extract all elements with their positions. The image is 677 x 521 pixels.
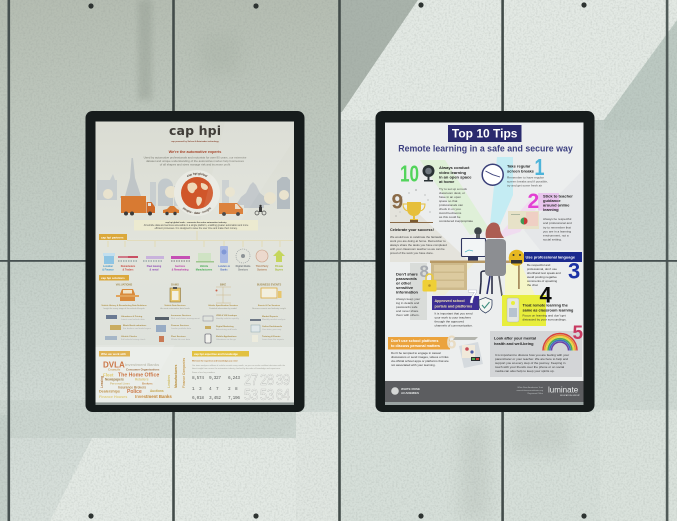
statistics numbers: 9,327	[209, 376, 221, 381]
sector: private buyers: Buyers	[275, 268, 284, 271]
tip body: have in an open	[439, 195, 461, 199]
tip body: Don't be tempted to engage in casual	[391, 351, 441, 355]
sector: digital media: Digital Media	[236, 265, 251, 268]
sector: leasing and finance: Location	[103, 265, 114, 268]
footer address	[517, 386, 544, 395]
tip body: touch with your friends over the phone or on social	[495, 365, 564, 369]
tip body	[543, 217, 572, 242]
tip body: as this could be	[439, 215, 461, 219]
poster: cap hpi	[86, 111, 304, 412]
sector: vehicle manufacturers: Vehicle	[200, 265, 209, 268]
tip heading: Take regular	[507, 164, 531, 168]
sector: lenders and banks: Banks	[220, 268, 228, 271]
column one details: Full vehicle history check	[121, 338, 146, 341]
tip body: Always keep your	[396, 297, 420, 301]
tip body: parent/carer or your teacher. We are here to help and	[495, 357, 568, 361]
word cloud: Investment Banks	[135, 394, 172, 399]
tip heading: Don't use school platforms	[391, 339, 438, 343]
subtitle: Remote learning in a safe and secure way	[398, 144, 573, 154]
tip body: the chat	[527, 283, 538, 287]
tip heading: learning	[543, 207, 559, 212]
icon: certificate	[261, 288, 282, 298]
tip 10: open space	[400, 160, 473, 223]
sector: auctions: & Remarketing	[172, 268, 189, 271]
statistics numbers: 8,574	[192, 376, 204, 381]
logo: white rose academies: ACADEMIES	[401, 391, 419, 395]
column headings: BUSINESS EVENTS	[257, 282, 281, 286]
word cloud: DVLA	[103, 360, 125, 370]
tip heading: Treat remote learning the	[522, 304, 568, 308]
column three details: Valuations on the go	[216, 338, 237, 341]
tip body	[527, 263, 561, 287]
tip body: try to remember that	[543, 225, 571, 229]
tip body: you are in a learning	[543, 229, 571, 233]
beige trees	[103, 186, 289, 204]
logo: luminate: luminate	[548, 386, 579, 394]
tip body	[390, 235, 447, 255]
column four details: Your data, your way	[262, 328, 282, 331]
logo: white rose academies	[391, 387, 420, 395]
tip body: screen breaks and if possible,	[507, 180, 548, 184]
sector: vehicle manufacturers: Manufacturers	[196, 268, 213, 271]
tip heading: screen breaks	[507, 168, 535, 174]
motorbike	[255, 205, 266, 215]
tip body: considered inappropriate	[439, 219, 473, 223]
tip heading: around online	[543, 202, 570, 208]
column one details: Latest used vehicle data	[121, 318, 145, 321]
number 9: 9	[392, 190, 403, 214]
tip 7: approved portals	[432, 287, 492, 328]
tip 1: screen breaks	[482, 154, 548, 188]
icon: car front	[116, 289, 139, 301]
solution captions: Business events and industry insight	[252, 307, 286, 310]
orange lorry	[121, 196, 155, 216]
tip body: Avoid bedrooms	[439, 211, 462, 215]
tip heading: Always conduct	[439, 165, 470, 170]
solution captions: Vehicle Specification Services	[208, 304, 239, 307]
tip body: your work to your teachers	[434, 316, 471, 320]
statistics numbers: 3,452	[209, 396, 221, 401]
callout: cap hpi global code: All vehicle data and services accessible in a single platform, enabling greater automation and more	[144, 224, 249, 227]
confetti	[396, 189, 430, 216]
tip 2: teacher guidance	[508, 190, 573, 242]
tip heading: to discuss personal matters	[391, 344, 440, 348]
statistics numbers: 27	[244, 372, 258, 389]
illustration: phone collage	[459, 342, 483, 368]
word cloud: Retailers	[135, 378, 149, 382]
data intro: Some of our key numbers	[192, 372, 215, 374]
tag: key partners	[99, 234, 127, 240]
globe badge	[174, 170, 220, 216]
tip body: log in details and	[396, 301, 419, 305]
word cloud: Police	[127, 389, 142, 395]
tip body: via official school apps or platforms that are	[391, 359, 449, 363]
column three details: Mobile Applications	[216, 335, 237, 338]
column three details: Digital Marketing	[216, 325, 234, 328]
tip body: Try to set up a mock	[439, 187, 467, 191]
drawer unit	[431, 263, 467, 290]
word cloud: Auctions	[150, 389, 164, 393]
tip body: Be respectful and	[527, 263, 551, 267]
word cloud: Manufacturers	[174, 365, 178, 388]
data intro	[192, 360, 286, 374]
sector: lenders and banks	[218, 246, 230, 271]
sector: auctions	[171, 256, 190, 271]
desk	[430, 260, 521, 263]
column four details	[250, 315, 286, 342]
sector: leasing and finance	[102, 253, 115, 271]
tip heading: video learning	[439, 170, 467, 175]
tip body	[495, 353, 569, 373]
sector: third party systems	[256, 250, 269, 271]
tip heading	[494, 336, 536, 346]
word cloud	[99, 358, 186, 399]
tip body	[391, 351, 449, 367]
tip heading: same as classroom learning	[522, 308, 574, 312]
column three details: Identify vehicles quickly	[216, 317, 240, 320]
tip body: shorthand text speak and	[527, 271, 561, 275]
number 6: 6	[446, 332, 457, 352]
statistics numbers: 53	[244, 387, 258, 404]
poster sheet	[385, 122, 584, 381]
title banner: Top 10 Tips	[452, 127, 518, 141]
chair legs	[480, 271, 502, 296]
tip body	[507, 176, 548, 188]
webcam on monitor	[474, 227, 482, 238]
word cloud: Insurance Brokers	[118, 386, 146, 390]
tip body: It is important that you send	[434, 312, 473, 316]
tip 4: classroom learning	[502, 282, 574, 326]
statistics numbers: 64	[276, 387, 290, 404]
globe badge: cap hpi global	[187, 172, 208, 177]
poster sheet	[96, 122, 294, 402]
solution detail rows	[105, 315, 286, 343]
column four details: Market Reports	[262, 315, 279, 318]
tip heading: at home	[439, 179, 455, 184]
sector: digital media	[236, 249, 251, 271]
tip body: discussions or send images, videos or links	[391, 355, 449, 359]
sector: third party systems: Systems	[257, 268, 268, 271]
statistics numbers: 6,243	[228, 376, 240, 381]
column one details: Valuations & Pricing	[121, 315, 143, 318]
footer address: White Rose Academies Trust	[517, 386, 543, 389]
number 3: 3	[568, 258, 580, 284]
statistics numbers: 28	[260, 372, 274, 389]
tip heading	[543, 194, 573, 212]
solution captions	[101, 304, 286, 310]
tip heading	[391, 339, 440, 348]
logo: luminate: EDUCATION GROUP	[560, 394, 580, 397]
tip body: them with others.	[396, 313, 420, 317]
statistics numbers: 2 8	[228, 387, 238, 392]
solution captions: Insight for every stage of the vehicle lifecycle	[103, 307, 145, 310]
intro paragraph	[144, 156, 247, 166]
column headings: DAMS	[171, 282, 179, 286]
tip heading	[434, 299, 472, 308]
statistics numbers: 6,018	[192, 396, 204, 401]
tip heading bar: Use professional language	[526, 254, 576, 260]
column headings: BIKE	[220, 282, 226, 286]
sector: leasing and finance: & Finance	[102, 268, 114, 271]
icon: rainbow	[543, 334, 577, 350]
sector: third party systems: Third Party	[256, 265, 269, 268]
tip heading: guidance	[543, 198, 561, 203]
tip body: professionals can	[439, 203, 463, 207]
word cloud: Fleet	[103, 372, 114, 378]
tip body: space so that	[439, 199, 458, 203]
tip body: through the approved	[434, 320, 464, 324]
data intro: We have the expertise and knowledge you need	[192, 360, 238, 362]
word cloud: Investment Banks	[125, 362, 160, 367]
statistics numbers: 4 7	[209, 387, 219, 392]
tip heading: passwords	[396, 276, 418, 281]
callout: cap hpi global code	[134, 220, 258, 230]
tip 9: celebrate success	[390, 189, 447, 255]
tip heading: or other	[396, 280, 412, 286]
tag: who we work with	[99, 351, 130, 356]
city skyline silhouette	[97, 158, 290, 209]
sector: vehicle manufacturers	[196, 253, 214, 271]
tip body	[439, 187, 473, 223]
partner connector lines	[108, 231, 293, 247]
tip body: channels of communication.	[434, 324, 473, 328]
sector: fleet leasing: Fleet leasing	[147, 265, 162, 268]
intro paragraph: Used by automotive professionals and motorists for over 80 years, our extensive	[144, 156, 247, 160]
number 1: 1	[534, 154, 545, 180]
column four details: Monthly market analysis	[262, 318, 286, 321]
poster frame	[86, 111, 304, 412]
column four details: Learn from the experts	[262, 338, 285, 341]
tip body: classroom desk, or	[439, 191, 465, 195]
number 2: 2	[528, 190, 539, 213]
orange van	[219, 203, 243, 216]
intro paragraph: of all shapes and sizes manage risk and increase profit	[160, 162, 230, 166]
statistics numbers	[192, 372, 290, 404]
central learner illustration	[430, 223, 521, 296]
column four details: Online Dashboards	[262, 326, 283, 328]
poster: top 10 tips	[376, 111, 594, 412]
tip body: media can also help to keep your spirits up.	[495, 369, 555, 373]
word cloud: Leasing	[100, 376, 104, 388]
tip body: It is important to discuss how you are feeling with your	[495, 353, 569, 357]
tag: data heading: cap hpi expertise and knowledge	[194, 352, 238, 356]
tag: key solutions: cap hpi solutions	[101, 276, 125, 280]
statistics numbers: 39	[276, 372, 290, 389]
logo: cap hpi: cap hpi	[169, 123, 221, 138]
sector: private buyers	[273, 250, 285, 271]
solution captions: Events & Car Services	[258, 304, 281, 307]
column three details: VRM & VIN Lookups	[216, 315, 238, 317]
tip body: always share the tasks you have completed	[390, 243, 447, 247]
tip body: check in on you.	[439, 207, 461, 211]
tip heading: Celebrate your success!	[390, 228, 434, 232]
icon: door hanger	[507, 298, 519, 322]
icon: clipboard	[170, 287, 180, 302]
sector: auctions: Auctions	[175, 265, 186, 268]
column three details: Advertising and leads	[216, 328, 238, 331]
tip body: social setting.	[543, 238, 562, 242]
callout: cap hpi global code: efficient processes. It is designed to save the user time and make their money.	[155, 227, 238, 230]
column two details: Whole life cost data	[171, 338, 191, 341]
statistics numbers: 7,196	[228, 396, 240, 401]
number 8: 8	[420, 262, 429, 281]
tip body	[434, 312, 473, 328]
column two details: Finance Services	[171, 325, 190, 327]
column one details: Vehicle Checks	[121, 336, 138, 338]
sector: digital media: Services	[238, 268, 249, 271]
tip body: and never share	[396, 309, 419, 313]
tip body: environment, not a	[543, 234, 569, 238]
icon: padlock	[422, 274, 436, 292]
solution captions: Accurate automotive data feeds	[160, 307, 190, 310]
column two details: Fleet Services	[171, 335, 186, 338]
monitor	[462, 238, 486, 260]
tip heading: Don't share	[396, 272, 419, 276]
icon: trophy	[403, 202, 425, 222]
icon: webcam	[422, 165, 434, 182]
column four details: Training & Events	[262, 335, 281, 338]
tip body: Remember to have regular	[507, 176, 544, 180]
column one details: Black Book valuations	[123, 324, 147, 327]
column three details	[203, 315, 240, 343]
icon: shield	[479, 298, 492, 313]
solution captions: Vehicle Data Services	[164, 304, 187, 307]
heading: automotive experts: We're the automotive experts	[169, 150, 221, 154]
tip body: try and get some fresh air	[507, 184, 542, 188]
tip heading: information	[396, 290, 419, 294]
sector: remarketers: Remarketers	[121, 265, 136, 268]
tip body: professional, don't use	[527, 267, 557, 271]
column headings	[116, 282, 281, 286]
tip heading	[507, 164, 535, 174]
tip body: avoid posting negative	[527, 275, 557, 279]
tip body	[522, 314, 567, 322]
column two details: Risk and claims management	[171, 317, 200, 320]
tip 8: passwords	[396, 262, 436, 320]
tip 6: personal matters	[388, 332, 483, 368]
chair back	[485, 239, 506, 276]
solution captions: Detailed information by model	[209, 307, 237, 310]
word cloud: Dealerships	[99, 390, 120, 394]
word cloud: Personal Lines	[110, 382, 130, 386]
intro paragraph: dataset and unique understanding of the automotive market help businesses	[146, 159, 244, 163]
number 7: 7	[468, 287, 478, 307]
tip heading	[396, 272, 419, 294]
tip body: work you are doing at home. Remember to	[390, 239, 446, 243]
tip body: and professional and	[543, 221, 572, 225]
column two details: Lender portfolio data	[171, 327, 192, 330]
tip body: with your classroom teacher so we can be	[390, 247, 445, 251]
sector: fleet leasing: & rental	[150, 268, 159, 271]
number 10: 10	[400, 160, 419, 186]
tip heading: sensitive	[396, 285, 414, 290]
column one details	[105, 315, 152, 341]
word cloud: Brokers	[142, 382, 153, 386]
footer address: www.whiteroseacademies.org	[517, 389, 543, 392]
tip heading: Look after your mental	[494, 336, 536, 340]
tip body: passwords safe	[396, 305, 418, 309]
number 5: 5	[572, 323, 584, 344]
sunlight falling across the posters	[96, 122, 294, 402]
word cloud: Finance Companies	[182, 358, 186, 388]
tip body: Focus on learning and don't get	[522, 314, 566, 318]
tag: key partners: cap hpi partners	[101, 235, 124, 239]
tip 3: professional language	[509, 250, 582, 287]
footer address: Registered Office	[528, 392, 544, 395]
statistics numbers: 1 3	[192, 387, 202, 392]
globe badge: people · data · insight	[182, 207, 212, 214]
tip body: distracted by your surroundings.	[522, 318, 567, 322]
orange car	[163, 206, 179, 215]
column one details: For dealers and trade buyers	[123, 327, 152, 330]
tip heading: Approved school	[434, 299, 465, 303]
sector: private buyers: Private	[275, 265, 284, 268]
word cloud: Councils	[108, 368, 121, 372]
tip body: proud of the work you have done.	[390, 251, 434, 255]
tablet illustration	[508, 211, 539, 229]
icon: emoji	[509, 250, 525, 266]
statistics numbers: 53	[260, 387, 274, 404]
column two details	[155, 315, 200, 342]
tip body: not associated with your learning.	[391, 363, 436, 367]
callout: cap hpi global code: cap hpi global code – connects the entire automotive industry	[165, 221, 227, 224]
tip body: support you at every step of the journey. Keeping in	[495, 361, 566, 365]
icon: clock	[482, 164, 503, 185]
column headings: VALUATIONS	[116, 282, 133, 286]
word cloud: Newspapers	[105, 378, 124, 382]
icon: specification grid	[216, 287, 231, 303]
word cloud: The Home Office	[118, 372, 159, 378]
poster frame	[376, 111, 594, 412]
solution captions: Vehicle History & Remarketing Data Solutions	[101, 304, 147, 307]
hair	[486, 223, 504, 238]
tag: key solutions	[99, 275, 129, 280]
tip body: Always be respectful	[543, 217, 572, 221]
data intro: Our team analyses millions of vehicle records every month, so you can make confident decisions with the	[192, 364, 286, 367]
partner sectors row	[102, 246, 285, 271]
sector: remarketers: & Traders	[122, 268, 134, 271]
bottom section background	[96, 347, 294, 402]
tip heading	[439, 165, 472, 184]
sector: fleet leasing	[143, 256, 164, 271]
tip heading: Stick to teacher	[543, 194, 573, 198]
data intro: latest insight from across the automotive industry, backed by decades of knowledge and experience.	[192, 367, 281, 370]
tip heading: health and well-being	[494, 341, 534, 346]
sector: remarketers	[118, 256, 138, 271]
word cloud: Consumer Organisations	[126, 368, 160, 372]
tip body	[396, 297, 420, 317]
tip 5: mental health	[490, 323, 584, 377]
footer band	[385, 381, 584, 405]
column two details: Insurance Services	[171, 315, 192, 317]
word cloud: Finance Houses	[99, 395, 127, 399]
tip heading: in an open space	[439, 174, 472, 180]
tip heading: portals and platforms	[434, 304, 472, 308]
tag: who we work with: Who we work with	[101, 352, 126, 356]
logo: white rose academies: WHITE ROSE	[401, 387, 420, 391]
word cloud: Lenders	[167, 375, 171, 388]
sector: lenders and banks: Lenders &	[218, 265, 230, 268]
number 4: 4	[540, 282, 552, 308]
tip body: We would love to celebrate the fantastic	[390, 235, 442, 239]
tip heading	[522, 304, 574, 312]
tip body: comments of upsetting	[527, 279, 558, 283]
tag: data heading	[192, 351, 249, 356]
light beams from the learner	[390, 157, 583, 295]
tagline: cap powered by Solera & Autotrader technology	[171, 140, 220, 143]
